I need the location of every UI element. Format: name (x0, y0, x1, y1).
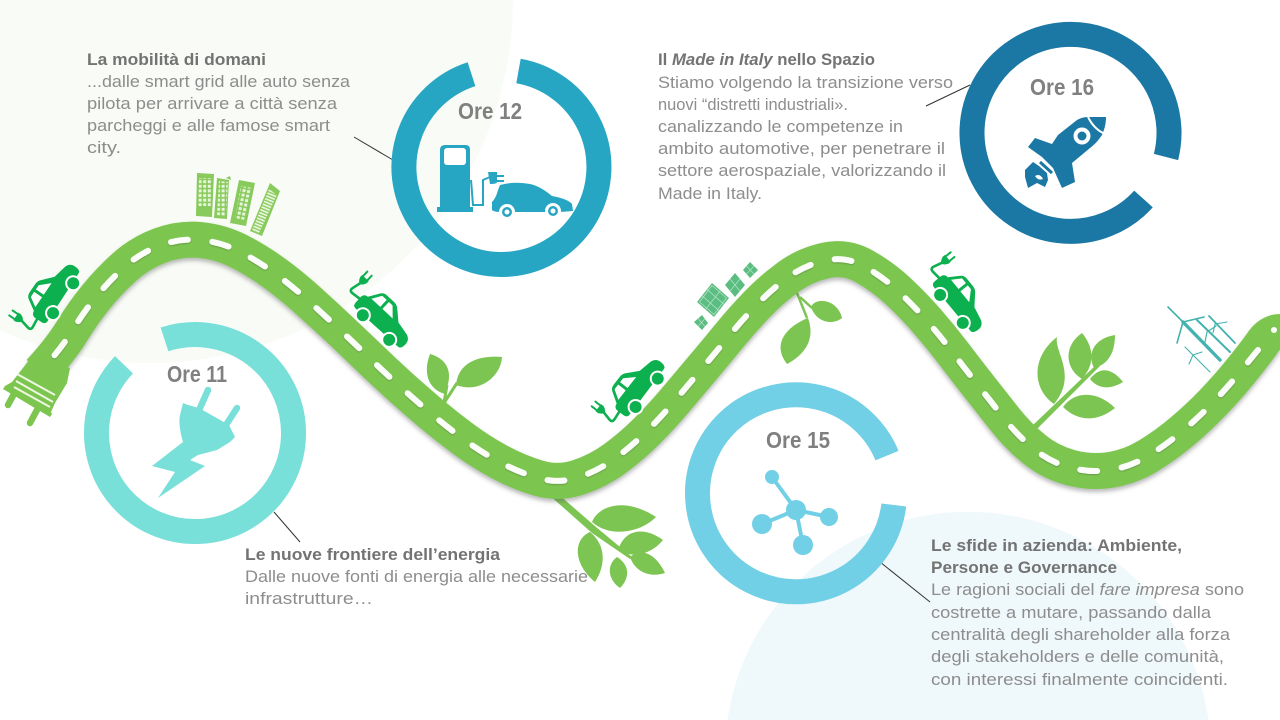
text block: La mobilità di domani: pilota per arrivare a città senza (87, 94, 338, 113)
leader line: Ore 16 (926, 85, 970, 106)
background circle: top left (0, 0, 513, 363)
ring Ore 11 (97, 335, 294, 532)
ring Ore 15 (697, 395, 894, 592)
ring Ore 12 (404, 71, 599, 264)
car icon 3 (591, 345, 673, 434)
buildings (196, 173, 280, 236)
road lane dashes (40, 240, 1258, 481)
label Ore 15: Ore 15 (766, 427, 830, 453)
text block: Made in Italy nello Spazio: canalizzando le competenze in (658, 117, 903, 136)
plant: under the road valley (548, 494, 665, 588)
plant: under second peak (781, 293, 842, 364)
label Ore 12: Ore 12 (458, 98, 522, 124)
road end dot (1271, 327, 1277, 333)
text block: Le nuove frontiere dell'energia: Dalle nuove fonti di energia alle necessarie (245, 567, 588, 586)
leader line: Ore 12 (354, 137, 393, 160)
leader line: Ore 11 (274, 512, 300, 542)
text block: Le sfide in azienda: Persone e Governance (931, 558, 1117, 577)
icon: molecule network (752, 470, 838, 555)
icon: rocket (1025, 117, 1106, 188)
text block: Made in Italy nello Spazio: settore aerospaziale, valorizzando il (658, 161, 946, 180)
plant: top of valley one (427, 354, 502, 403)
label Ore 11: Ore 11 (167, 361, 227, 387)
text block: La mobilità di domani (87, 50, 351, 157)
label Ore 16: Ore 16 (1030, 74, 1094, 100)
text block: Le sfide in azienda: Le ragioni sociali del fare impresa sono (931, 580, 1244, 599)
text block: Made in Italy nello Spazio: Il Made in Italy nello Spazio (658, 50, 875, 69)
text block: Le sfide in azienda: con interessi finalmente coincidenti. (931, 670, 1228, 689)
icon: charging pump and car (437, 145, 573, 220)
car icon 2 (337, 271, 424, 356)
background circle: bottom right (728, 512, 1208, 720)
text block: Made in Italy nello Spazio: Made in Italy. (658, 184, 762, 203)
text block: Made in Italy nello Spazio: Stiamo volgendo la transizione verso (658, 73, 953, 92)
text block: La mobilità di domani: parcheggi e alle famose smart (87, 116, 330, 135)
panel: Ore 16 (972, 34, 1169, 231)
text block: Le nuove frontiere dell'energia (245, 545, 588, 608)
road (40, 240, 1280, 481)
solar panels (694, 262, 758, 330)
panel: Ore 12 (404, 71, 599, 264)
text block: Made in Italy nello Spazio: nuovi “distretti industriali». (658, 95, 848, 114)
panel: Ore 11 (97, 335, 294, 532)
panel: Ore 15 (697, 395, 894, 592)
text block: Le sfide in azienda: costrette a mutare, passando dalla (931, 603, 1212, 622)
text block: Made in Italy nello Spazio: ambito automotive, per penetrare il (658, 139, 945, 158)
text block: Le sfide in azienda (931, 536, 1244, 689)
car icon 4 (916, 251, 999, 340)
icon: plug with lightning (152, 390, 237, 498)
text block: Le sfide in azienda: centralità degli shareholder alla forza (931, 625, 1231, 644)
text block: Le nuove frontiere dell'energia: infrastrutture… (245, 589, 373, 608)
text block: La mobilità di domani: ...dalle smart grid alle auto senza (87, 72, 351, 91)
text block: Made in Italy nello Spazio (658, 50, 953, 203)
text block: Le sfide in azienda: Le sfide in azienda: Ambiente, (931, 536, 1182, 555)
ring Ore 16 (972, 34, 1169, 231)
plug at road start (3, 355, 70, 423)
text block: Le nuove frontiere dell'energia: Le nuove frontiere dell’energia (245, 545, 501, 564)
car icon 1 (8, 251, 88, 341)
text block: La mobilità di domani: La mobilità di domani (87, 50, 266, 69)
text block: La mobilità di domani: city. (87, 138, 121, 157)
plant: large branch (1033, 333, 1123, 430)
text block: Le sfide in azienda: degli stakeholders e delle comunità, (931, 647, 1224, 666)
wind turbines (1168, 307, 1235, 372)
leader line: Ore 15 (880, 562, 930, 602)
